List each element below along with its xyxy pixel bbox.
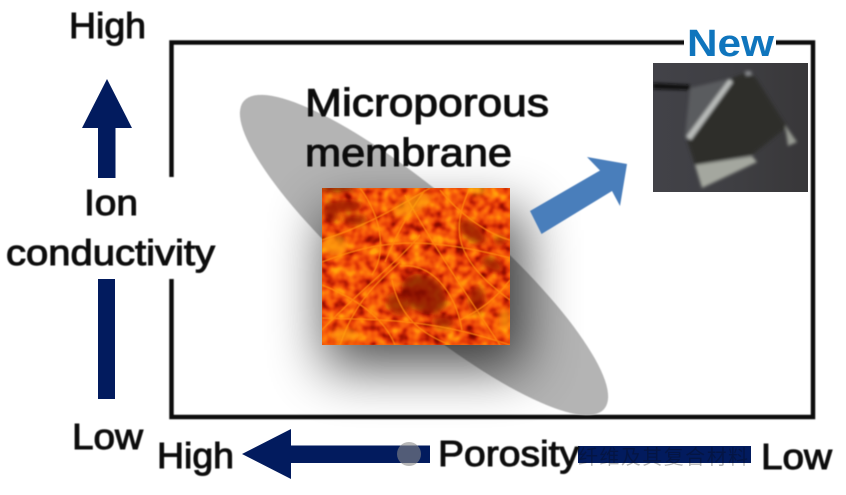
watermark bbox=[397, 442, 748, 469]
x axis title: Porosity: Porosity bbox=[438, 433, 579, 474]
heading: Microporous membrane bbox=[305, 82, 549, 175]
watermark: 纤维及其复合材料 bbox=[578, 446, 748, 469]
y axis label: Low: Low bbox=[72, 416, 144, 457]
y axis title: Ion conductivity bbox=[6, 182, 215, 273]
y axis label: High: High bbox=[69, 5, 146, 46]
x axis label: High: High bbox=[157, 435, 234, 476]
label: New: New bbox=[687, 23, 774, 65]
fibers bbox=[322, 188, 510, 345]
y axis arrow lower bbox=[98, 279, 115, 399]
x axis arrow right bbox=[578, 446, 751, 463]
x axis arrow left bbox=[242, 429, 430, 479]
y axis arrow upper bbox=[82, 79, 132, 178]
image shadow bbox=[324, 212, 524, 368]
y axis title: Ion conductivity: conductivity bbox=[6, 232, 215, 273]
plot frame bbox=[172, 42, 813, 417]
heading: Microporous membrane: Microporous bbox=[305, 82, 549, 125]
y axis title: Ion conductivity: Ion bbox=[84, 182, 138, 223]
x axis label: Low: Low bbox=[761, 436, 833, 477]
bright yellow fibre patches bbox=[322, 186, 511, 341]
blue arrow toward new membrane bbox=[530, 157, 627, 234]
dark pores bbox=[319, 186, 506, 328]
microporous membrane micrograph bbox=[319, 186, 511, 345]
grey ellipse: microporous membrane region bbox=[206, 57, 642, 453]
heading: Microporous membrane: membrane bbox=[305, 132, 512, 175]
new membrane photo bbox=[653, 63, 808, 192]
white mask behind New label bbox=[684, 30, 776, 56]
